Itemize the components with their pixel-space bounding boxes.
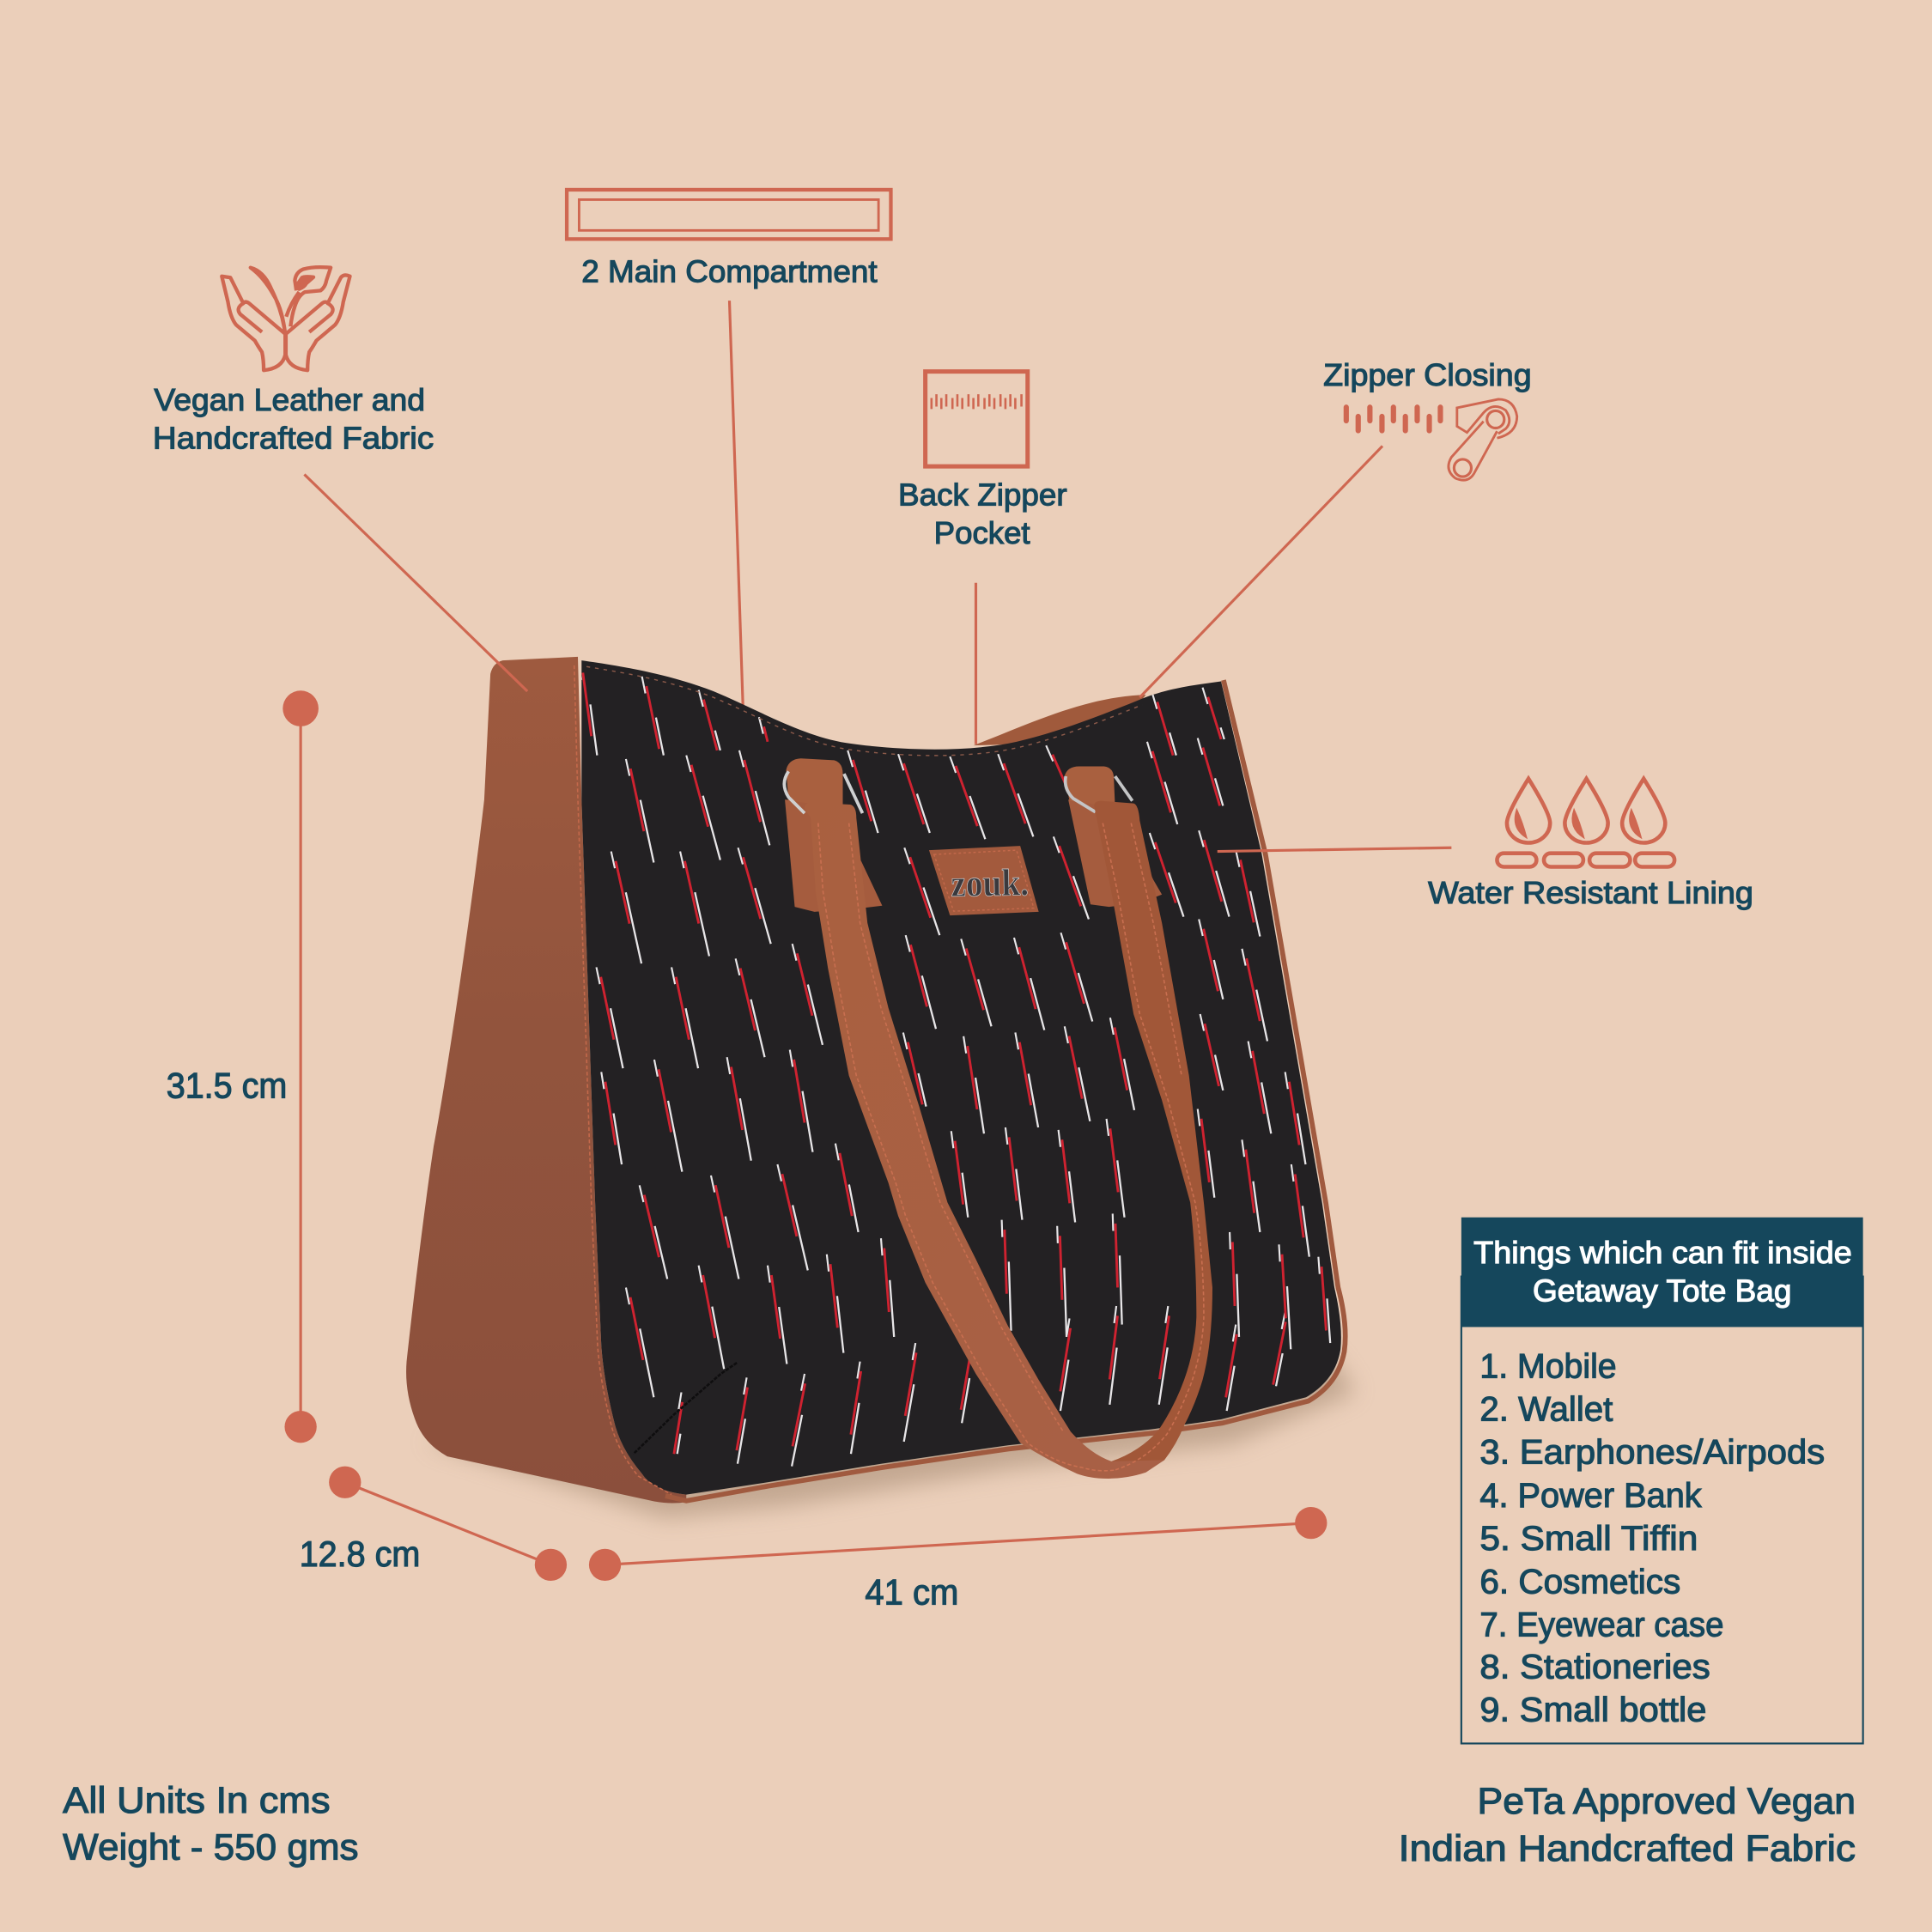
- callout: zipper closing: [1323, 358, 1532, 480]
- brand logo: zouk.: [951, 860, 1029, 905]
- footer note: certifications: [1399, 1781, 1856, 1869]
- tote bag photo illustration: [406, 657, 1346, 1503]
- right strap loop and ring: [1065, 767, 1133, 812]
- dimension: height: [167, 690, 319, 1443]
- label: vegan leather: Vegan Leather and: [154, 383, 425, 417]
- dimension: width: 41 cm: [865, 1571, 958, 1612]
- left strap rear tab: [785, 799, 882, 912]
- strap stitching: [818, 823, 1204, 1471]
- icon: zipper pull: [1346, 399, 1517, 480]
- ikat stripes: [579, 663, 1330, 1467]
- right strap rear tab: [1068, 799, 1162, 907]
- top edge stitching: [586, 666, 1142, 756]
- label: vegan leather: Handcrafted Fabric: [153, 421, 434, 455]
- panel header: Getaway Tote Bag: [1533, 1273, 1791, 1308]
- item list: 4. Power Bank: [1479, 1476, 1703, 1515]
- dimension: depth: 12.8 cm: [300, 1534, 420, 1574]
- seam dart: [634, 1363, 737, 1454]
- footer note: units and weight: Weight - 550 gms: [63, 1826, 359, 1868]
- item list: [1479, 1346, 1825, 1729]
- label: zipper closing: Zipper Closing: [1323, 358, 1532, 392]
- icon: water drops: [1497, 779, 1674, 866]
- panel header: [1461, 1218, 1863, 1327]
- callout: water resistant lining: [1428, 779, 1753, 910]
- left shoulder strap: [805, 803, 1164, 1479]
- callout line: zipper closing: [1139, 446, 1382, 697]
- item list: 1. Mobile: [1479, 1346, 1617, 1385]
- label: water resistant lining: Water Resistant Lining: [1428, 876, 1753, 910]
- label: main compartment: 2 Main Compartment: [581, 255, 878, 289]
- label: vegan leather: [153, 383, 434, 455]
- label: back zipper pocket: Pocket: [934, 516, 1030, 550]
- bag side panel: [406, 657, 686, 1503]
- item list: 2. Wallet: [1479, 1389, 1613, 1428]
- icon: pocket with zipper: [926, 372, 1028, 466]
- panel: things which fit inside: [1461, 1218, 1863, 1743]
- callout: back zipper pocket: [898, 372, 1067, 550]
- label: back zipper pocket: [898, 477, 1067, 550]
- callout line: vegan leather: [304, 474, 527, 691]
- brand patch: [929, 846, 1039, 915]
- footer note: units and weight: All Units In cms: [63, 1780, 331, 1821]
- dimension: width: [589, 1507, 1327, 1612]
- item list: 7. Eyewear case: [1479, 1606, 1723, 1644]
- panel border: [1461, 1277, 1863, 1743]
- bag front fabric: [581, 660, 1341, 1495]
- item list: 9. Small bottle: [1479, 1691, 1706, 1729]
- callout: two main compartment: [567, 190, 890, 289]
- panel header: Things which can fit inside: [1473, 1236, 1852, 1270]
- callout line: water resistant: [1218, 848, 1451, 852]
- label: back zipper pocket: Back Zipper: [898, 477, 1067, 512]
- item list: 6. Cosmetics: [1479, 1562, 1680, 1601]
- footer note: certifications: Indian Handcrafted Fabric: [1399, 1828, 1856, 1869]
- footer note: certifications: PeTa Approved Vegan: [1478, 1781, 1856, 1822]
- bag inner lining: [974, 695, 1146, 745]
- icon: hands holding plant: [222, 267, 350, 370]
- side seam stitching: [574, 665, 671, 1495]
- bag front edge piping: [665, 680, 1346, 1501]
- footer note: units and weight: [63, 1780, 359, 1868]
- callout line: main compartment: [729, 301, 743, 708]
- item list: 5. Small Tiffin: [1479, 1519, 1698, 1558]
- left strap loop and ring: [784, 758, 862, 813]
- right shoulder strap: [1094, 801, 1212, 1479]
- item list: 3. Earphones/Airpods: [1479, 1433, 1825, 1472]
- callout: vegan leather and handcrafted fabric: [153, 267, 434, 455]
- bag floor shadow: [425, 1355, 1355, 1518]
- dimension: height: 31.5 cm: [167, 1066, 287, 1106]
- icon: compartment rectangles: [567, 190, 890, 239]
- item list: 8. Stationeries: [1479, 1647, 1710, 1686]
- dimension: depth: [300, 1467, 567, 1581]
- callout line: back zipper: [975, 583, 977, 744]
